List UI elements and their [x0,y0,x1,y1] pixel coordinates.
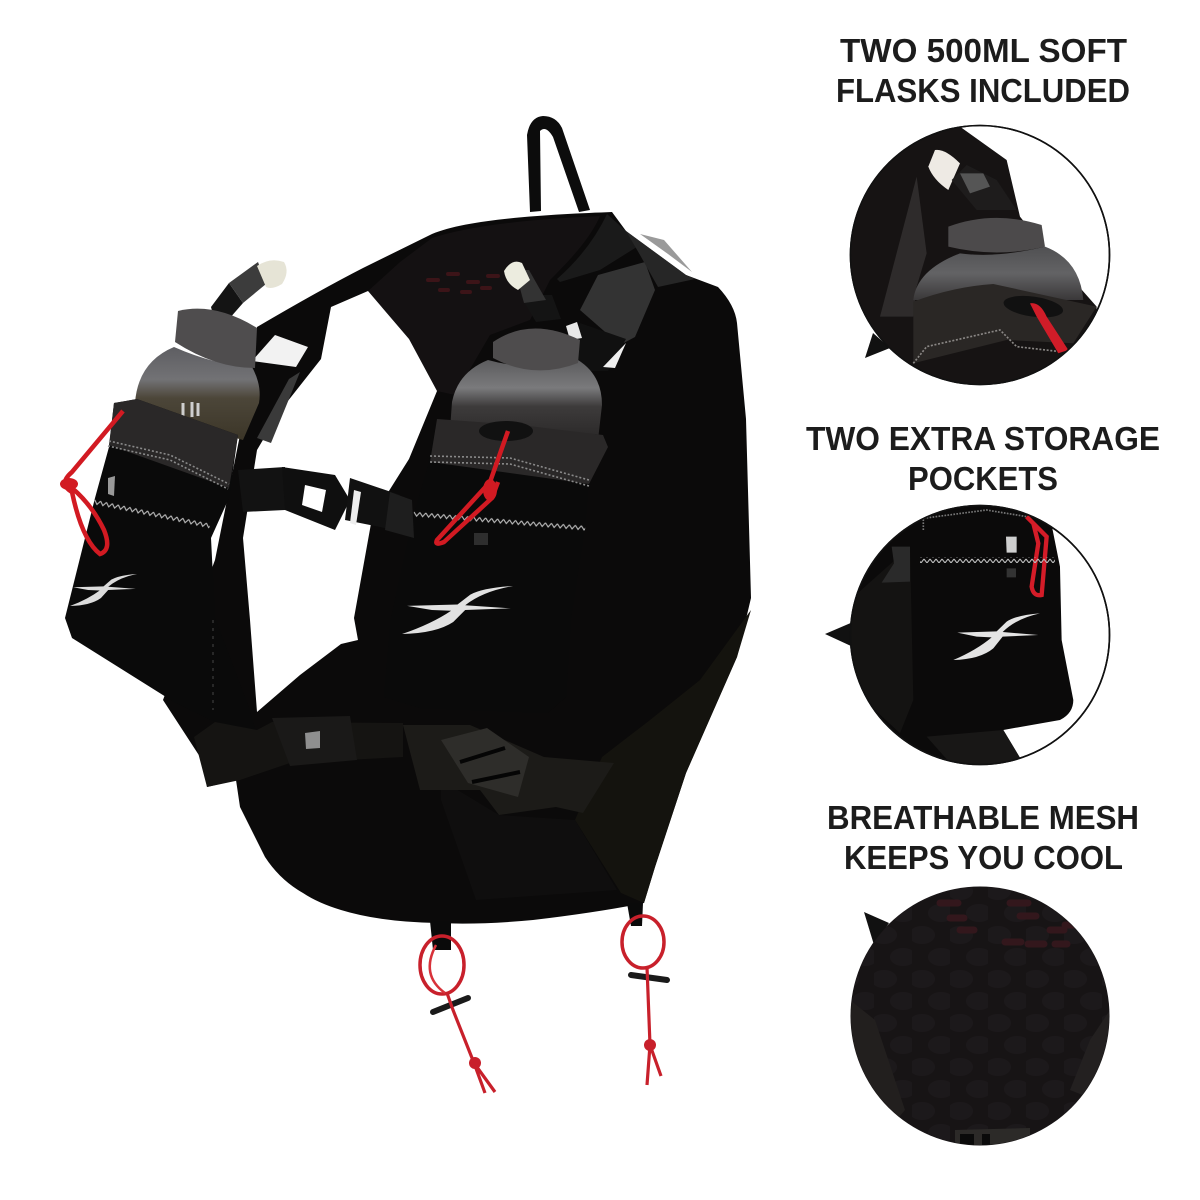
heading: breathable mesh [827,799,1139,876]
small white tag [603,343,626,368]
left bottle [135,260,287,440]
cap [175,309,257,368]
left logo [70,574,137,606]
chest strap and buckle [238,467,414,538]
right logo [402,586,513,634]
heading: storage pockets: TWO EXTRA STORAGE [806,420,1160,457]
right bottom cord [622,903,667,1085]
callout circle: flask detail [840,126,1110,393]
product photo: hydration vest [60,116,751,1093]
hanger loop [527,116,590,212]
right red cord [436,431,508,544]
shoulder highlight [640,234,692,272]
nozzle [211,260,287,319]
right pocket [384,419,608,713]
callout circle: pocket detail [825,500,1110,767]
grey strap highlight [257,372,300,443]
callout circle: mesh detail [850,886,1110,1150]
zipper [212,620,214,710]
drawcord port [479,421,533,441]
inner lower mesh [441,780,617,900]
heading: storage pockets: POCKETS [908,460,1058,497]
heading: breathable mesh: KEEPS YOU COOL [844,839,1123,876]
cap [493,328,580,370]
mesh buckle right [568,323,626,371]
shoulder pad [580,262,655,345]
right bottle [450,262,602,440]
bottle body [450,360,602,440]
heading: soft flasks: TWO 500ML SOFT [840,32,1127,69]
left red cord [60,411,123,554]
heading: storage pockets [806,420,1160,497]
bottle body [135,347,260,440]
white gap between straps [243,291,437,712]
waist adjuster slider [403,725,614,815]
number marking [183,402,198,417]
heading: soft flasks: FLASKS INCLUDED [836,72,1130,109]
back mesh with red dots [368,216,600,395]
right side panel edge [575,610,751,903]
shoulder top [626,231,695,287]
heading: breathable mesh: BREATHABLE MESH [827,799,1139,836]
vest body [163,212,751,924]
small white nub [566,322,582,340]
nozzle [504,262,561,322]
reflective tag [252,335,308,367]
shoulder strap binding [557,214,640,282]
left pocket [65,399,257,735]
heading: soft flasks [836,32,1130,109]
waist strap and buckle [194,716,403,787]
left bottom cord [420,921,495,1093]
